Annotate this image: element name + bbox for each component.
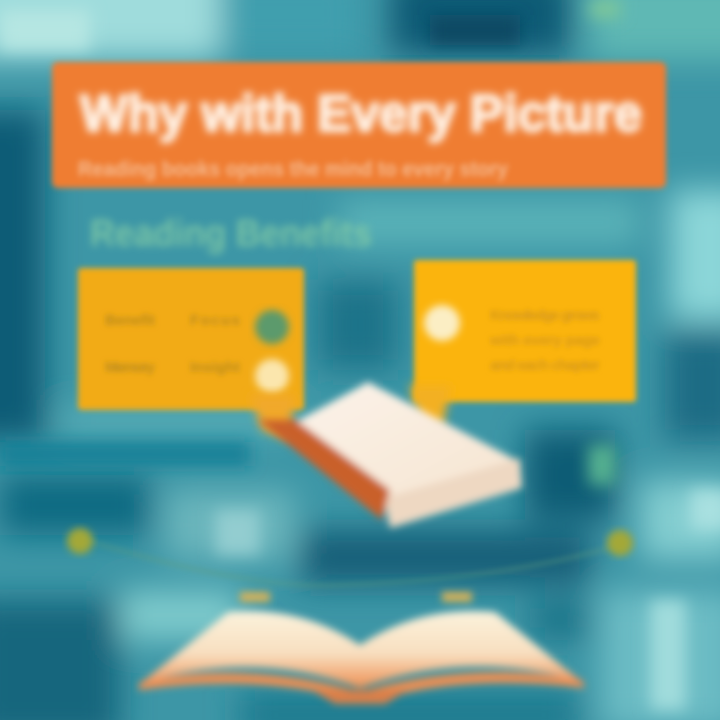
icon: left dot bbox=[67, 528, 93, 554]
icon: cream circle bbox=[424, 305, 460, 341]
connector line with yellow dots bbox=[67, 528, 633, 585]
icon: cream circle bbox=[255, 359, 289, 393]
connector down to book bbox=[250, 395, 295, 440]
right card text bbox=[489, 307, 600, 374]
title text: Why with Every Picture bbox=[80, 85, 642, 143]
left card text: Focus bbox=[190, 312, 240, 329]
icon: teal circle bbox=[255, 310, 289, 344]
icon: closed book bbox=[258, 382, 522, 528]
left card text: Insight bbox=[190, 359, 240, 376]
title banner: orange bbox=[52, 62, 666, 188]
panel: right yellow card bbox=[410, 260, 636, 428]
heading: green subheading: Reading Benefits bbox=[90, 213, 372, 255]
right card text: with every page bbox=[489, 332, 600, 349]
icon: right dot bbox=[607, 530, 633, 556]
connector down to book bbox=[410, 385, 452, 428]
left card text bbox=[105, 312, 240, 376]
panel: left yellow card bbox=[78, 268, 304, 440]
right card text: and each chapter bbox=[490, 357, 600, 374]
icon: open book bbox=[138, 592, 585, 704]
right card text: Knowledge grows bbox=[490, 307, 600, 324]
subtitle text: Reading books opens the mind to every story bbox=[78, 158, 508, 181]
left card text: Memory bbox=[105, 359, 156, 376]
left card text: Benefit bbox=[105, 312, 155, 329]
